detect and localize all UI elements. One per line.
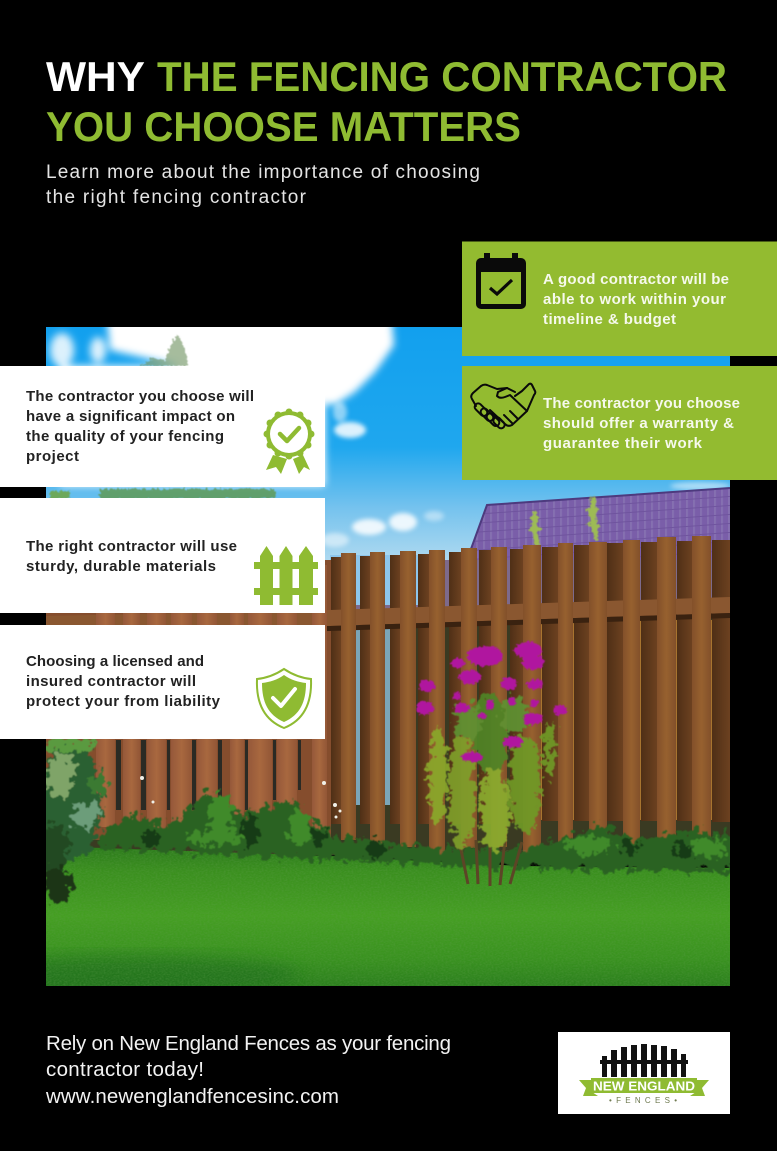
text: materials [26,538,237,575]
fence rail [46,597,730,631]
dark gaps, left section [116,740,301,810]
footer call to action: www.newenglandfencesinc.com [45,1085,339,1108]
back pickets [46,540,730,840]
flowering plant [416,642,567,886]
text: quality: have a significant impact on [26,408,235,425]
icon: award rosette [264,408,314,474]
sky [46,327,730,567]
text: timeline [543,271,729,328]
text: liability [26,653,221,710]
stems [460,835,522,886]
icon: shield with check [257,669,311,728]
title: THE FENCING CONTRACTOR [157,53,727,100]
subtitle: the right fencing contractor [46,187,307,208]
text: quality: the quality of your fencing [26,428,224,445]
clouds [50,300,730,547]
undergrowth along fence [100,776,735,872]
panel: timeline card [462,242,777,356]
panel: liability card [0,625,325,739]
text: liability: protect your from liability [26,693,221,710]
gaps behind fence [46,555,730,855]
foliage [429,693,556,852]
purple roof [471,488,730,560]
logo tagline: •FENCES• [609,1096,677,1105]
logo: New England Fences [558,1032,730,1114]
icon: handshake [471,384,535,430]
footer call to action: contractor today! [46,1058,204,1081]
logo banner: NEW ENGLAND [593,1078,695,1094]
text: timeline: A good contractor will be [543,271,729,288]
subtitle [46,162,480,208]
text: timeline: able to work within your [543,291,726,308]
text: quality: The contractor you choose will [26,388,254,405]
subtitle: Learn more about the importance of choosing [46,162,480,183]
flowers [416,642,567,762]
icon: calendar [476,253,526,309]
bush at left [38,738,107,903]
icon: fence [254,546,318,605]
lawn [46,848,730,986]
text: warranty: The contractor you choose [543,395,740,412]
panel: quality card [0,366,325,487]
text: quality: project [26,448,79,465]
text: materials: sturdy, durable materials [26,558,216,575]
text: liability: Choosing a licensed and [26,653,204,670]
text: warranty: guarantee their work [543,435,703,452]
text: warranty: should offer a warranty & [543,415,734,432]
grass texture [46,850,730,986]
roof edge [471,488,730,549]
panel: warranty card [462,366,777,480]
title: YOU CHOOSE MATTERS [46,103,521,150]
logo banner [579,1078,709,1096]
front pickets, right section [341,536,711,864]
text: quality [26,388,254,465]
vines above the fence [527,496,601,546]
title [46,53,727,150]
title: WHY [46,53,145,100]
text: timeline: timeline & budget [543,311,676,328]
logo fence [600,1044,688,1077]
photo: wooden fence, flowers and lawn [46,327,730,986]
lawn shade [46,951,293,986]
front pickets, left section [96,565,327,850]
tree tops behind cards [50,334,275,499]
text: materials: The right contractor will use [26,538,237,555]
text: liability: insured contractor will [26,673,196,690]
text: warranty [543,395,740,452]
footer call to action [45,1032,451,1108]
panel: materials card [0,498,325,613]
footer call to action: Rely on New England Fences as your fencing [46,1032,451,1055]
